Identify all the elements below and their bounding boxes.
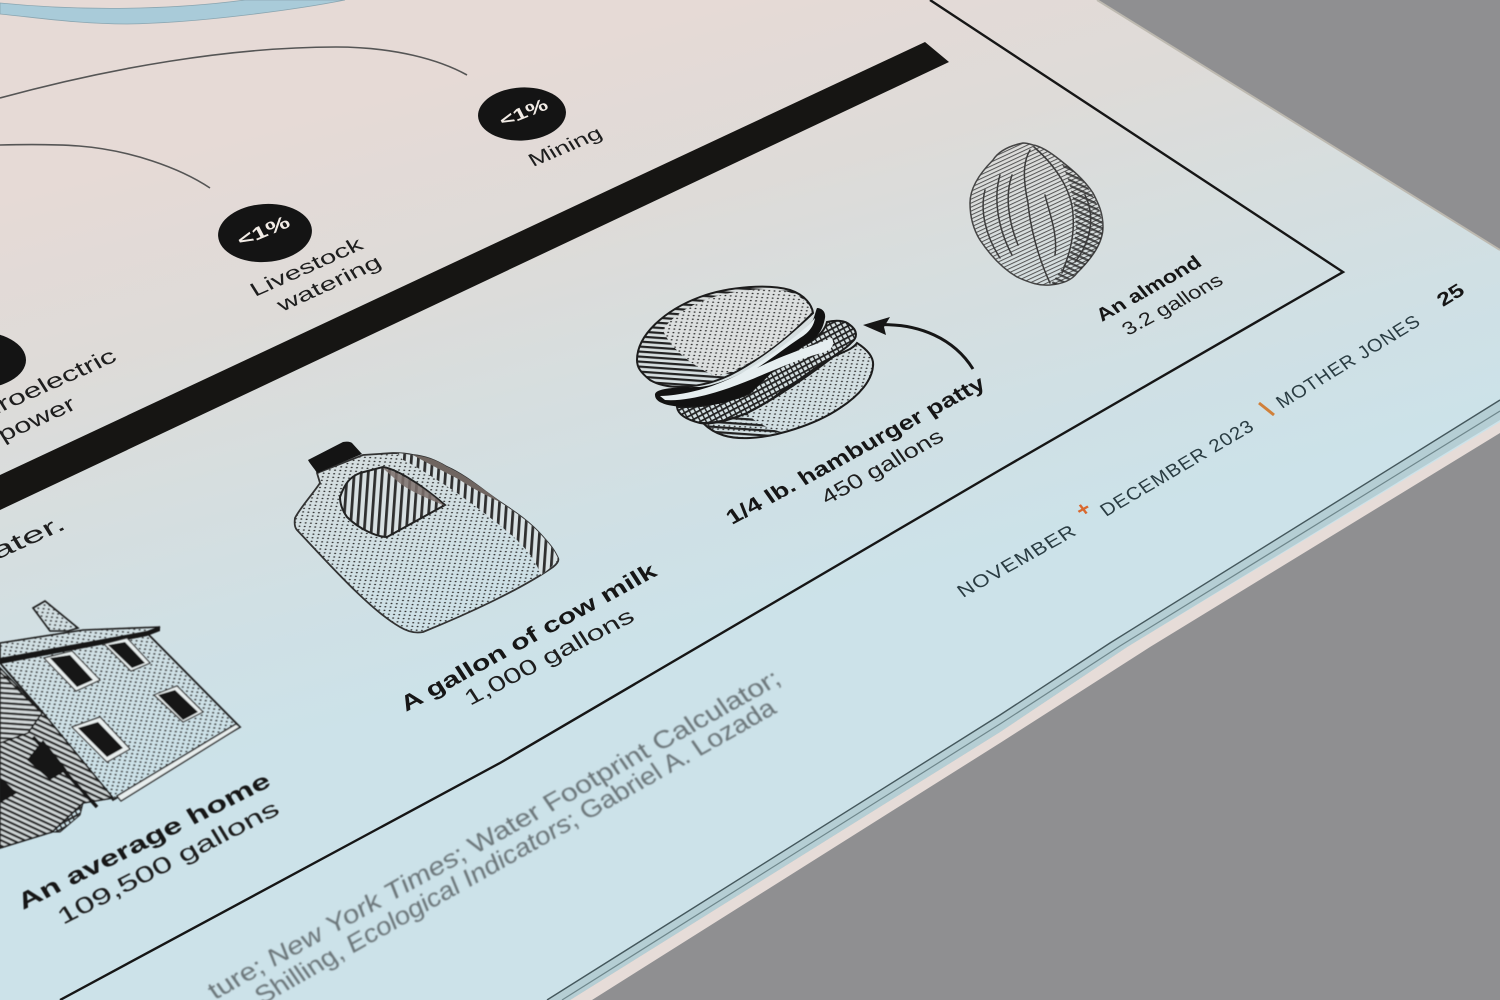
page top edge	[1097, 0, 1500, 250]
icon: hamburger	[637, 287, 873, 438]
jug handle shadow	[383, 468, 445, 506]
label: average home	[12, 768, 284, 929]
house windows	[50, 642, 198, 757]
label: almond: An almond	[1092, 252, 1206, 326]
footer: folio text: +	[1070, 496, 1096, 522]
label: livestock watering: Livestock	[246, 234, 368, 301]
almond outline	[970, 143, 1103, 285]
jug back shadow	[413, 455, 502, 503]
icon: livestock percentage circle: <1%	[234, 213, 294, 251]
label: hamburger patty: 450 gallons	[816, 425, 948, 509]
label: livestock watering	[246, 234, 386, 317]
label: livestock watering: watering	[272, 252, 386, 317]
magazine page edge strip	[570, 420, 1500, 1000]
icon: hydroelectric percentage circle	[0, 331, 26, 389]
label: almond	[1092, 252, 1228, 340]
blue river arc at top	[0, 0, 345, 24]
jug shaded side	[397, 453, 558, 575]
jug body	[295, 453, 558, 632]
footer: folio text: MOTHER JONES	[1272, 311, 1425, 412]
footer: folio text: DECEMBER 2023	[1096, 415, 1258, 520]
page number: 25	[1433, 280, 1469, 311]
icon: almond	[970, 143, 1103, 285]
label: almond: 3.2 gallons	[1118, 270, 1228, 340]
jug cap	[308, 442, 362, 473]
house chimney	[33, 601, 78, 631]
almond shaded side	[1050, 160, 1103, 285]
lettuce	[660, 318, 833, 400]
icon: house	[0, 601, 240, 848]
top bun	[637, 287, 813, 387]
jug handle opening	[340, 467, 445, 537]
label: hydroelectric power	[0, 344, 121, 446]
label: hamburger patty: 1/4 lb. hamburger patty	[721, 372, 990, 529]
footer: folio text: NOVEMBER	[953, 520, 1081, 601]
icon: livestock percentage circle	[216, 201, 314, 265]
arrow: to hamburger patty	[863, 317, 973, 369]
house porch	[0, 668, 113, 848]
connector curve to livestock watering	[0, 145, 210, 188]
icon: milk jug	[295, 442, 558, 632]
label: average home: 109,500 gallons	[52, 795, 284, 929]
label: mining: Mining	[524, 123, 606, 171]
label: gallon of cow milk: 1,000 gallons	[459, 604, 639, 710]
label: average home: An average home	[12, 768, 275, 914]
icon: mining percentage circle	[477, 85, 567, 143]
connector curve to mining	[0, 47, 467, 98]
icon: mining percentage circle: <1%	[496, 95, 551, 130]
house window frames	[44, 638, 203, 762]
bottom bun	[703, 343, 873, 438]
source credits: ture; New York Times ; Water Footprint Calculator;	[203, 665, 786, 1000]
label: gallon of cow milk	[395, 558, 662, 716]
house roof	[0, 626, 160, 664]
heavy divider bar	[0, 42, 949, 510]
almond ribs	[983, 147, 1091, 283]
patty	[677, 321, 856, 423]
label: gallon of cow milk: A gallon of cow milk	[395, 558, 662, 716]
footer: folio text	[953, 311, 1425, 601]
burger filling	[655, 308, 825, 407]
house wall	[0, 633, 240, 801]
